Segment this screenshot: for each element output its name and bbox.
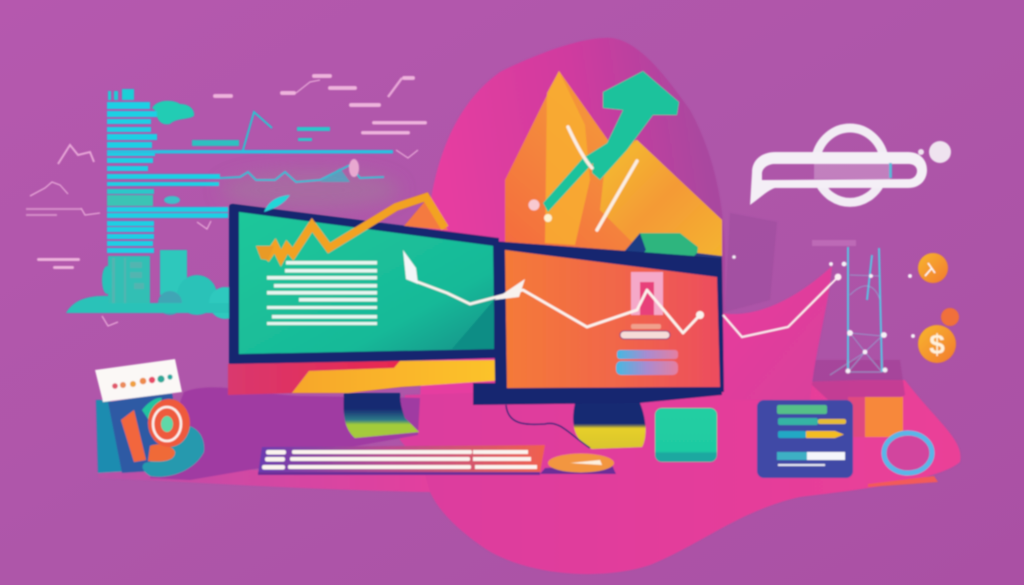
white line continuing right bbox=[723, 274, 842, 337]
tablet bars bbox=[777, 405, 827, 414]
target circle bbox=[148, 399, 190, 447]
green leaf bbox=[142, 398, 162, 425]
tower base bbox=[108, 256, 150, 313]
network tower bbox=[732, 240, 915, 375]
dark blue panel bbox=[108, 392, 178, 473]
keyboard rows bbox=[262, 450, 537, 470]
bars on screen bbox=[616, 324, 678, 375]
orange box bbox=[848, 397, 903, 437]
tower mid block bbox=[107, 195, 153, 206]
tower nodes bbox=[732, 255, 915, 374]
cloud hills bbox=[66, 266, 241, 319]
monitor lower strip bbox=[473, 383, 722, 405]
yellow right facet bbox=[600, 140, 722, 262]
feather pen icon bbox=[264, 195, 290, 212]
mouse with pad bbox=[540, 454, 616, 474]
house dots bbox=[528, 200, 552, 222]
orange house shape bbox=[505, 71, 722, 262]
left monitor bbox=[228, 195, 505, 438]
orange bar bbox=[121, 410, 146, 462]
white card bbox=[95, 359, 182, 402]
monitor frame bbox=[493, 241, 724, 396]
green cube bbox=[655, 408, 717, 462]
pink line sketches bbox=[30, 78, 418, 326]
tower stripes bbox=[107, 102, 393, 253]
monitor screen bbox=[239, 212, 494, 354]
text rows on screen bbox=[267, 261, 377, 325]
dollar coin bbox=[918, 325, 956, 363]
white arrow line on screen bbox=[403, 250, 704, 333]
tower cloud bbox=[152, 101, 194, 124]
green shape behind right monitor bbox=[623, 233, 722, 270]
bubble inner bar bbox=[889, 163, 892, 178]
white chart strokes on house bbox=[568, 127, 637, 230]
side building bbox=[160, 250, 187, 295]
ring arcs bbox=[816, 128, 884, 202]
dollar coin: $ bbox=[929, 329, 945, 360]
pink icon on screen bbox=[631, 272, 663, 315]
orange streak bbox=[868, 476, 938, 487]
monitor stand right bbox=[573, 403, 646, 449]
monitor stand bbox=[343, 393, 419, 438]
coin top bbox=[918, 253, 948, 283]
lower pink blob bbox=[400, 380, 961, 574]
left badge icon group bbox=[95, 359, 204, 477]
teal blob bbox=[142, 425, 204, 477]
blue ring bbox=[884, 433, 932, 473]
upper pink blob bbox=[420, 38, 725, 400]
cable bbox=[506, 405, 590, 448]
floor band bbox=[98, 469, 430, 492]
purple desk shadow bbox=[150, 387, 420, 480]
hazy chart backdrop bbox=[220, 170, 400, 210]
orange triangle behind left monitor bbox=[404, 200, 448, 230]
speech bubble with ring bbox=[750, 128, 951, 205]
bubble bbox=[750, 152, 927, 205]
keyboard bbox=[258, 445, 545, 475]
monitor yellow base bbox=[292, 360, 505, 393]
dots bbox=[918, 141, 951, 163]
blue tablet bbox=[757, 400, 853, 478]
pink dashes top bbox=[26, 74, 427, 269]
teal panel bbox=[96, 400, 150, 473]
bubble inner highlight bbox=[814, 164, 890, 179]
card hearts bbox=[112, 374, 173, 389]
green arrow bbox=[543, 71, 679, 212]
yellow facet bbox=[545, 71, 590, 245]
monitor frame bbox=[229, 204, 499, 366]
teal chart bars middle bbox=[164, 112, 384, 204]
orange rising line bbox=[256, 197, 445, 260]
orange blob bbox=[148, 444, 175, 461]
monitor screen bbox=[505, 250, 720, 388]
darker screen facet bbox=[452, 300, 494, 349]
monitor red base bbox=[228, 361, 400, 395]
muted purple shapes on right bbox=[725, 213, 905, 420]
right monitor bbox=[403, 241, 724, 449]
small orange dot bbox=[941, 308, 959, 326]
tower windows bbox=[112, 258, 144, 313]
tower top blocks bbox=[108, 89, 134, 100]
left city tower bbox=[66, 89, 393, 319]
pink hill on right bbox=[722, 266, 832, 400]
